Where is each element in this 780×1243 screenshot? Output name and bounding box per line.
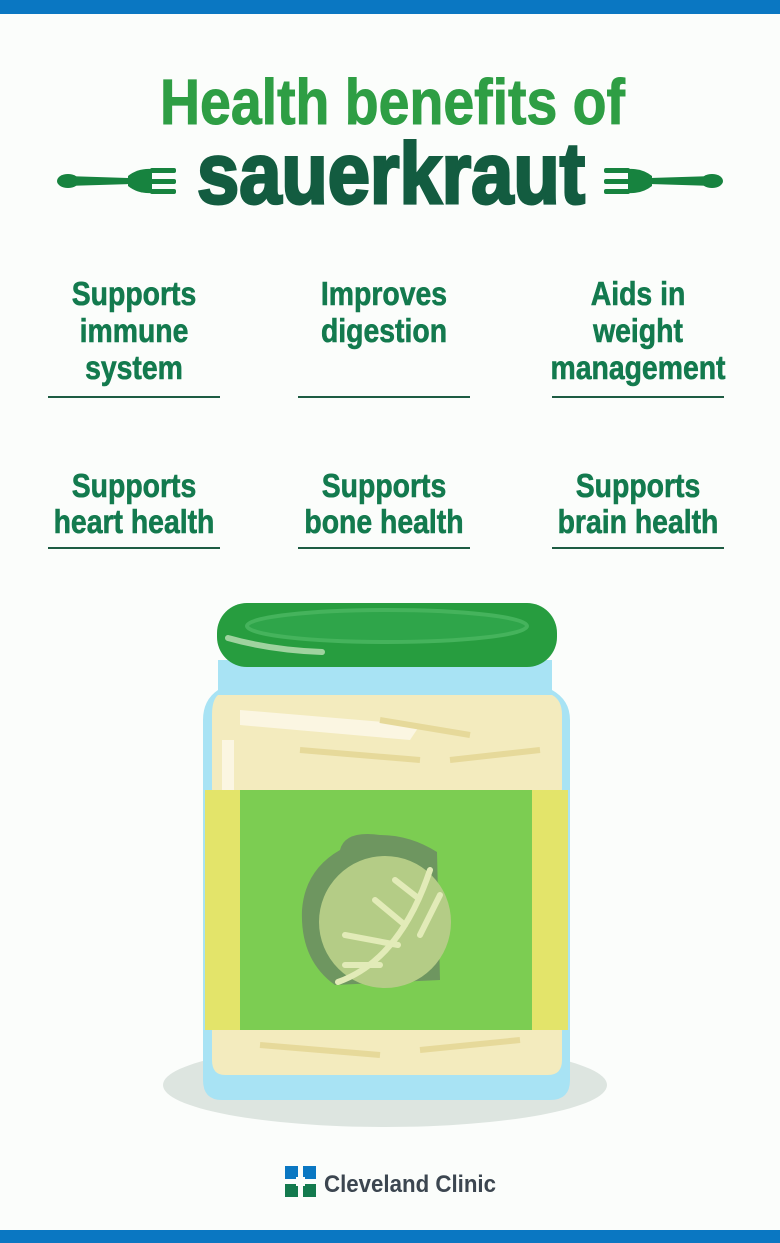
benefit: heart health: heart health xyxy=(54,503,214,541)
benefit: bone health xyxy=(298,467,470,549)
logo: Cleveland Clinic: Cleveland Clinic xyxy=(324,1171,496,1198)
benefit: bone health: Supports xyxy=(322,467,446,505)
benefit: immune system xyxy=(48,275,220,398)
title xyxy=(160,66,626,222)
bottom bar xyxy=(0,1230,780,1243)
benefit: weight management: management xyxy=(550,349,726,387)
top bar xyxy=(0,0,780,14)
benefit: immune system: immune xyxy=(80,312,188,350)
icon: cabbage xyxy=(302,834,451,988)
benefit: bone health: bone health xyxy=(304,503,464,541)
logo: Cleveland Clinic xyxy=(285,1166,496,1198)
benefit: digestion: Improves xyxy=(321,275,447,313)
benefit: immune system: system xyxy=(85,349,183,387)
benefit: weight management xyxy=(550,275,726,398)
benefit: weight management: weight xyxy=(592,312,683,350)
title: sauerkraut xyxy=(197,126,585,222)
benefit: brain health: brain health xyxy=(558,503,718,541)
benefit: weight management: Aids in xyxy=(591,275,685,313)
benefit: heart health: Supports xyxy=(72,467,196,505)
benefit: brain health: Supports xyxy=(576,467,700,505)
icon: left fork xyxy=(57,168,176,194)
benefit: digestion: digestion xyxy=(321,312,447,350)
benefit: immune system: Supports xyxy=(72,275,196,313)
title: Health benefits of xyxy=(160,66,626,138)
benefit: heart health xyxy=(48,467,220,549)
benefit: brain health xyxy=(552,467,724,549)
benefit: digestion xyxy=(298,275,470,398)
jar illustration xyxy=(163,603,607,1127)
icon: right fork xyxy=(604,168,723,194)
